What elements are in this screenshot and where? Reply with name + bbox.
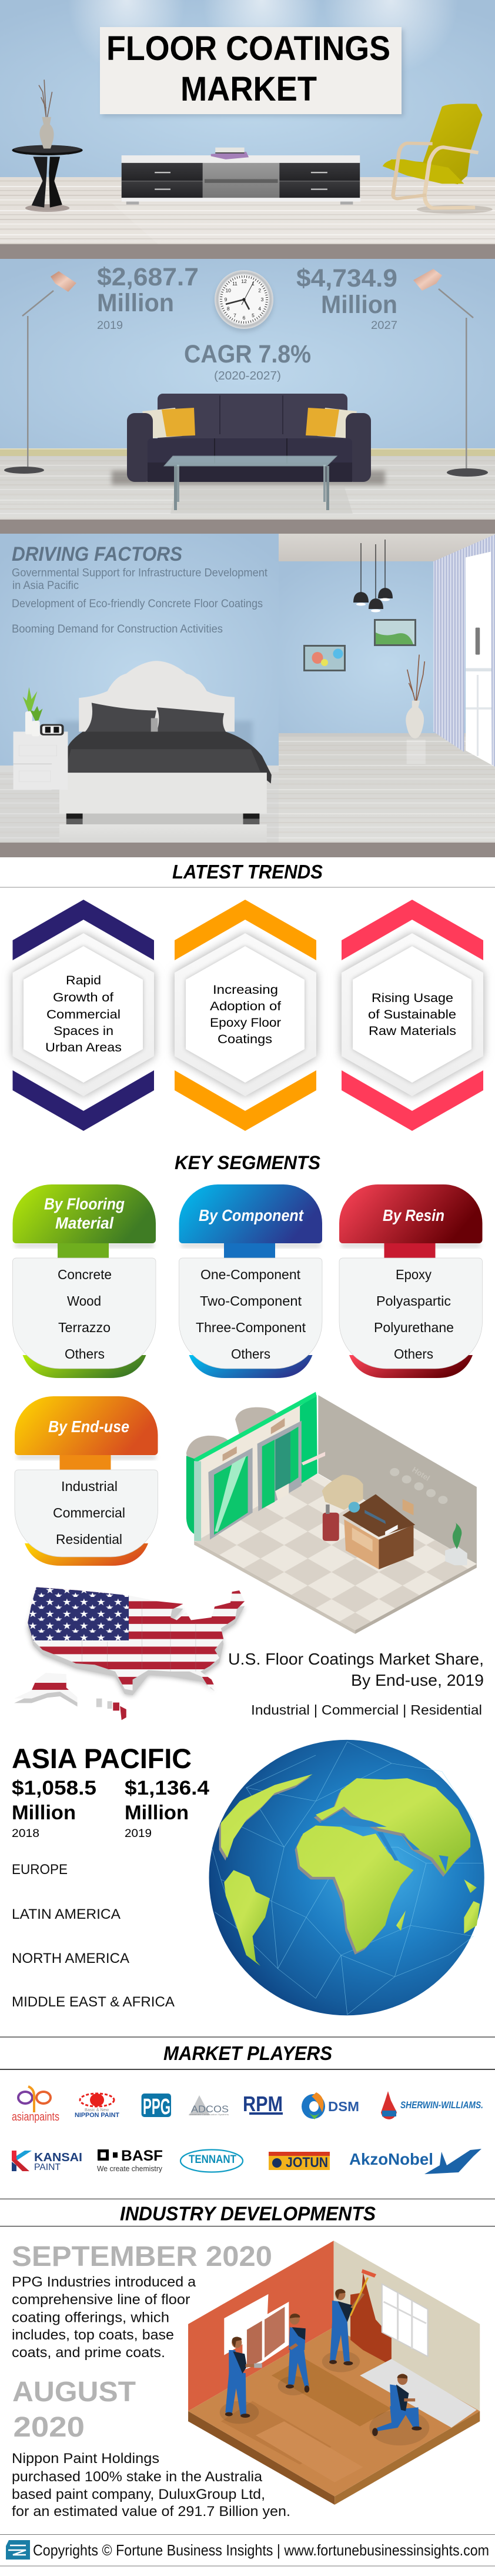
logo: AkzoNobel [349, 2149, 481, 2174]
text: asia pacific stats: ASIA PACIFIC [12, 1743, 192, 1774]
text: 2027 market size [296, 264, 397, 332]
illustration: kneeling worker [372, 2374, 422, 2436]
panel: by end-use [15, 1396, 158, 1566]
logo: RPM: RPM [243, 2092, 283, 2116]
title board: FLOOR COATINGS [106, 29, 390, 68]
text: 2027 market size: 2027 [371, 319, 397, 332]
text: resin heading: By Resin [383, 1206, 444, 1224]
icon: wall clock: 5 [252, 312, 255, 318]
text: 2027 market size: Million [321, 291, 397, 319]
footer: copyright [0, 2534, 495, 2567]
text: resin list: Epoxy [396, 1267, 432, 1282]
text: other regions: LATIN AMERICA [12, 1906, 121, 1922]
text: trend 3 label: Rising Usage [372, 991, 453, 1005]
logo: BASF: We create chemistry [97, 2164, 162, 2173]
text: august 2020 development: Nippon Paint Holdings [12, 2451, 159, 2467]
heading: market players: MARKET PLAYERS [163, 2042, 332, 2064]
text: trend 2 label: Increasing [213, 983, 278, 997]
text: 2019 market size [97, 263, 199, 332]
logo: asian paints [12, 2086, 59, 2124]
text: resin list [374, 1267, 454, 1362]
text: U.S. market share: Industrial | Commercial | Residential [251, 1702, 482, 1718]
icon: bed [52, 661, 272, 843]
title board [100, 27, 404, 117]
icon: framed landscape picture [374, 619, 416, 646]
icon: left floor lamp [4, 271, 76, 474]
heading: key segments: KEY SEGMENTS [175, 1152, 321, 1173]
icon: wall clock: 1 [252, 281, 255, 287]
text: hotel sign: Hotel [410, 1465, 432, 1483]
text: september 2020 development: SEPTEMBER 2020 [12, 2241, 272, 2272]
text: august 2020 development: AUGUST [12, 2377, 136, 2408]
logo: BASF: BASF [121, 2148, 163, 2164]
icon: wall clock: 3 [261, 297, 264, 302]
text: driving factors list: Governmental Support for Infrastructure Development [12, 566, 268, 579]
icon: wall clock: 7 [233, 312, 236, 318]
text: CAGR: CAGR 7.8% [184, 340, 311, 368]
icon: wall clock: 9 [225, 297, 228, 302]
logo: BASF [97, 2148, 163, 2173]
text: other regions: NORTH AMERICA [12, 1951, 129, 1966]
text: component list: Others [231, 1346, 270, 1362]
panel: driving factors bedroom [0, 534, 495, 857]
text: asia pacific stats: Million [12, 1802, 76, 1824]
illustration: worker holding window left [225, 2337, 262, 2418]
text: 2027 market size: $4,734.9 [296, 264, 397, 292]
icon: TV cabinet with books [122, 148, 360, 205]
text: flooring material list: Concrete [58, 1267, 112, 1282]
icon: USA flag map [12, 1585, 249, 1720]
icon: wall clock: 6 [243, 315, 246, 321]
text: asia pacific stats: $1,136.4 [125, 1777, 209, 1799]
logo: Fortune Business Insights [6, 2540, 30, 2560]
logo: Kansai Paint: PAINT [34, 2162, 61, 2172]
panel: living room hero [0, 0, 495, 259]
icon: sofa with pillows [112, 394, 385, 485]
logo: Jotun [269, 2152, 330, 2171]
text: driving factors list: in Asia Pacific [12, 579, 79, 592]
icon: nightstand with plants and clock [14, 687, 68, 790]
icon: wall clock: 4 [258, 306, 261, 312]
heading: industry developments: INDUSTRY DEVELOPMENTS [120, 2203, 376, 2224]
logo: Jotun: JOTUN [286, 2155, 328, 2171]
text: flooring material list: Others [65, 1346, 105, 1362]
text: trend 1 label: Growth of [53, 990, 113, 1004]
panel: market size room [0, 259, 495, 534]
logo: ADCOS [189, 2095, 229, 2116]
illustration: worker holding window right [286, 2314, 309, 2392]
text: august 2020 development [12, 2377, 290, 2520]
text: september 2020 development: PPG Industries introduced a [12, 2274, 196, 2290]
illustration: worker rolling paint [329, 2269, 376, 2365]
logo: Nippon Paint: NIPPON PAINT [75, 2112, 119, 2119]
logo: asian paints: asianpaints [12, 2111, 59, 2124]
text: 2019 market size: Million [97, 289, 174, 317]
heading: latest trends: LATEST TRENDS [172, 861, 323, 883]
text: CAGR: (2020-2027) [214, 370, 281, 382]
text: august 2020 development: for an estimated value of 291.7 Billion yen. [12, 2504, 290, 2520]
text: asia pacific stats: Million [125, 1802, 189, 1824]
panel: by flooring material [13, 1184, 156, 1378]
logo: PPG [142, 2094, 171, 2119]
text: flooring material heading: Material [55, 1214, 114, 1232]
text: asia pacific stats: 2019 [125, 1828, 152, 1840]
text: 2019 market size: 2019 [97, 319, 123, 332]
logo: Sherwin-Williams [381, 2091, 483, 2119]
icon: glass coffee table [164, 456, 353, 514]
text: end-use list: Commercial [53, 1505, 125, 1520]
text: trend 1 label: Spaces in [53, 1024, 113, 1038]
text: U.S. market share [228, 1650, 484, 1718]
logo: AkzoNobel: AkzoNobel [349, 2150, 433, 2168]
icon: hotel lobby illustration [186, 1392, 477, 1634]
text: component list: One-Component [200, 1267, 301, 1282]
icon: wall clock: 2 [258, 287, 261, 293]
title board: MARKET [180, 70, 317, 108]
icon: globe [209, 1740, 484, 2015]
icon: pendant lamps [353, 540, 393, 612]
text: driving factors list [12, 566, 268, 635]
text: trend 1 label: Rapid [66, 973, 101, 987]
text: other regions: EUROPE [12, 1862, 68, 1878]
text: trend 2 label: Epoxy Floor [210, 1016, 281, 1030]
text: trend 3 label: Raw Materials [369, 1024, 456, 1038]
text: flooring material list: Terrazzo [58, 1320, 111, 1335]
text: driving factors list: Development of Eco-friendly Concrete Floor Coatings [12, 597, 263, 610]
panel: by component [179, 1184, 322, 1378]
text: CAGR [184, 340, 311, 382]
text: trend 2 label [210, 983, 281, 1046]
icon: wall clock: 8 [227, 306, 230, 312]
text: end-use list [53, 1479, 125, 1547]
icon: floor vase [406, 655, 426, 764]
text: 2019 market size: $2,687.7 [97, 263, 199, 291]
text: component heading: By Component [199, 1206, 304, 1224]
icon: wall clock: 10 [225, 287, 231, 293]
logo: Tennant: TENNANT [189, 2154, 236, 2166]
logo: Nippon Paint: Basic & New [85, 2108, 109, 2112]
text: flooring material list: Wood [67, 1293, 101, 1309]
logo: ADCOS: Advanced Construction Systems [189, 2114, 229, 2116]
text: component list: Two-Component [200, 1293, 302, 1309]
text: end-use list: Industrial [61, 1479, 118, 1494]
text: end-use heading: By End-use [48, 1417, 129, 1436]
logo: PPG: PPG [143, 2095, 170, 2119]
panel: trend 2 [175, 900, 316, 1131]
text: flooring material heading: By Flooring [44, 1194, 125, 1213]
text: trend 1 label: Commercial [46, 1007, 121, 1021]
text: asia pacific stats: $1,058.5 [12, 1777, 96, 1799]
text: trend 1 label: Urban Areas [45, 1040, 122, 1054]
icon: wall clock: 11 [232, 281, 238, 287]
logo: Nippon Paint [75, 2094, 119, 2119]
text: trend 3 label: of Sustainable [368, 1007, 456, 1021]
text: asia pacific stats [12, 1743, 209, 1840]
text: trend 1 label [45, 973, 122, 1054]
text: other regions [12, 1862, 175, 2010]
logo: DSM: DSM [328, 2099, 359, 2114]
text: august 2020 development: 2020 [13, 2412, 85, 2443]
text: september 2020 development: comprehensive line of floor [12, 2292, 190, 2308]
heading: driving factors: DRIVING FACTORS [12, 543, 182, 565]
logo: DSM [302, 2092, 359, 2119]
text: other regions: MIDDLE EAST & AFRICA [12, 1994, 175, 2010]
icon: yellow armchair [383, 104, 493, 214]
text: resin list: Others [394, 1346, 433, 1362]
text: resin list: Polyaspartic [376, 1293, 451, 1309]
icon: framed abstract picture [303, 645, 346, 671]
icon: side table with vase [12, 79, 83, 212]
text: U.S. market share: By End-use, 2019 [351, 1671, 484, 1689]
text: end-use list: Residential [56, 1532, 122, 1547]
text: trend 2 label: Adoption of [210, 999, 281, 1013]
text: september 2020 development: includes, top coats, base [12, 2327, 174, 2343]
logo: Kansai Paint [12, 2151, 82, 2172]
text: august 2020 development: purchased 100% stake in the Australia [12, 2469, 263, 2485]
logo: Kansai Paint: KANSAI [34, 2151, 82, 2164]
text: september 2020 development [12, 2241, 272, 2361]
text: component list [196, 1267, 306, 1362]
text: trend 3 label [368, 991, 456, 1038]
text: U.S. market share: U.S. Floor Coatings Market Share, [228, 1650, 484, 1668]
panel: trend 3 [342, 900, 483, 1131]
icon: painters isometric room [188, 2241, 480, 2505]
text: flooring material list [58, 1267, 112, 1362]
text: resin list: Polyurethane [374, 1320, 454, 1335]
text: september 2020 development: coats, and prime coats. [12, 2345, 165, 2361]
text: driving factors list: Booming Demand for Construction Activities [12, 623, 223, 635]
icon: wall clock [215, 270, 273, 332]
panel: trend 1 [13, 900, 154, 1131]
logo: ADCOS: ADCOS [191, 2104, 229, 2115]
text: august 2020 development: based paint company, DuluxGroup Ltd, [12, 2487, 265, 2502]
logo: Tennant [180, 2150, 243, 2172]
icon: wall clock: 12 [241, 278, 247, 284]
panel: by resin [339, 1184, 482, 1378]
icon: right floor lamp [413, 269, 488, 477]
text: component list: Three-Component [196, 1320, 306, 1335]
text: september 2020 development: coating offerings, which [12, 2310, 169, 2325]
text: asia pacific stats: 2018 [12, 1828, 39, 1840]
text: flooring material heading [44, 1194, 125, 1232]
icon: window and curtains [433, 534, 495, 767]
text: trend 2 label: Coatings [218, 1032, 272, 1046]
